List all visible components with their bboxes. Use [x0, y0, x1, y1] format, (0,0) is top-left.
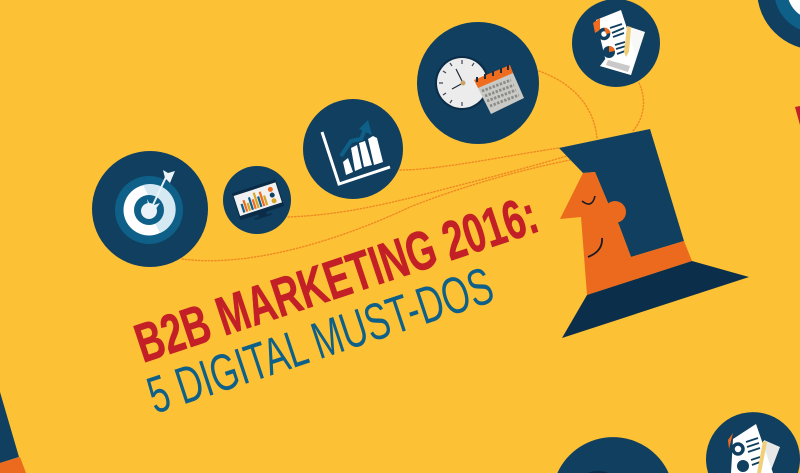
- ear: [604, 201, 626, 223]
- top-right red corner shape: [795, 106, 800, 125]
- mouth: [588, 238, 602, 257]
- title: B2B MARKETING 2016:: [127, 183, 545, 374]
- icon: top-right cropped target: [757, 0, 800, 50]
- figure: head with hat: [559, 129, 749, 338]
- icon: clock and calendar: [417, 22, 539, 144]
- icon: target: [92, 151, 208, 267]
- eye: [582, 196, 595, 204]
- icon: bottom-right cropped documents: [706, 412, 800, 473]
- hair: [559, 129, 684, 257]
- icon: growth chart: [303, 99, 403, 199]
- icon: documents: [572, 0, 660, 87]
- dotted connectors: [182, 71, 644, 261]
- subtitle: 5 DIGITAL MUST-DOS: [140, 257, 500, 425]
- bottom-left cropped figure: [0, 392, 26, 473]
- face: [560, 172, 692, 295]
- icon: monitor chart: [223, 166, 291, 234]
- brim: [562, 261, 749, 338]
- icon: bottom cropped clock: [557, 437, 669, 473]
